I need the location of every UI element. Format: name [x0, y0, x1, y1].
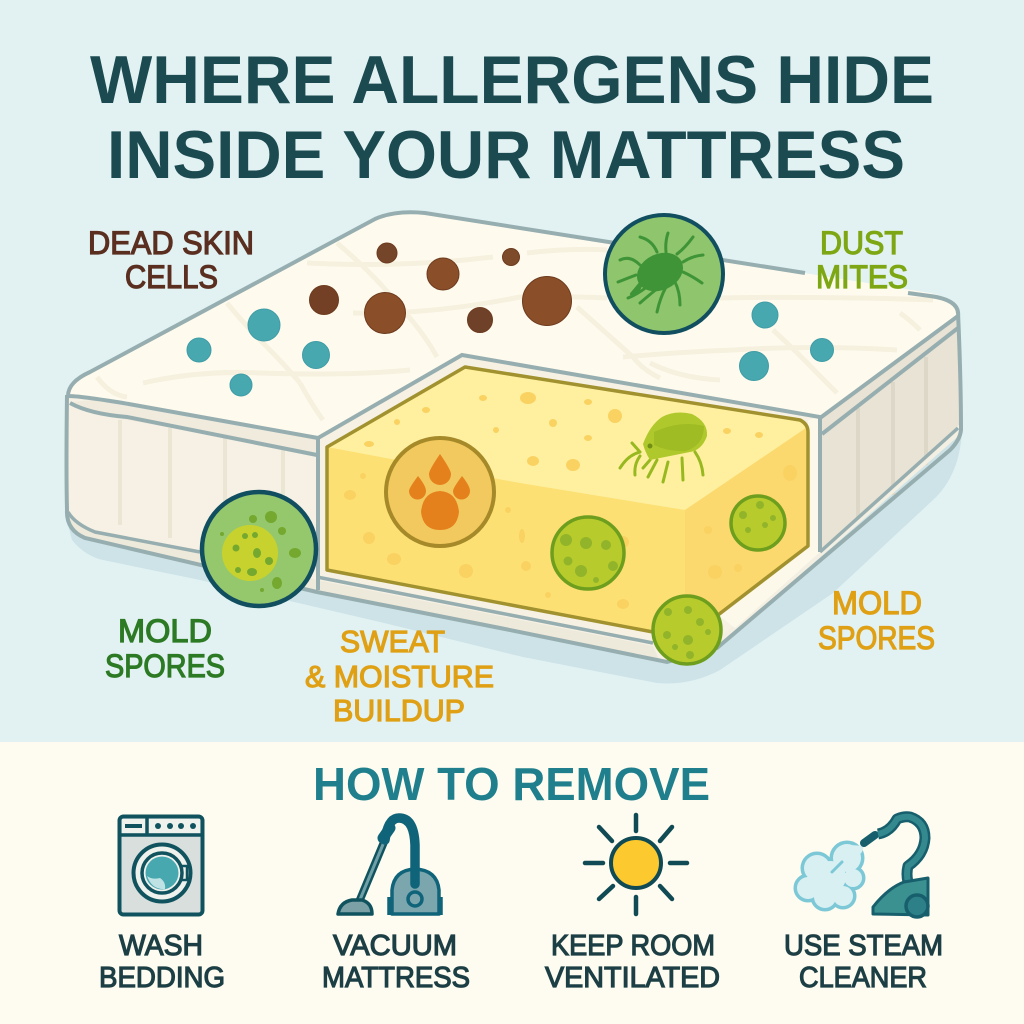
- mold spore circles: [552, 496, 785, 664]
- label: mold spores right: MOLD: [832, 585, 922, 621]
- label: mold spores left: SPORES: [105, 648, 225, 684]
- label: sweat and moisture buildup: & MOISTURE: [305, 659, 494, 694]
- callout: mold spores magnified: [202, 492, 316, 606]
- label: sweat and moisture buildup: BUILDUP: [333, 693, 465, 728]
- icon: vacuum cleaner: [338, 818, 441, 915]
- callout: sweat and moisture paw: [386, 438, 494, 546]
- label: wash bedding: WASH: [119, 930, 203, 962]
- mattress left side: [67, 395, 717, 662]
- label: dust mites: MITES: [816, 259, 908, 295]
- label: dead skin cells: CELLS: [125, 259, 218, 295]
- label: vacuum mattress: [322, 930, 470, 994]
- label: dead skin cells: DEAD SKIN: [88, 225, 254, 261]
- label: keep room ventilated: KEEP ROOM: [551, 930, 715, 962]
- label: dust mites: [816, 225, 908, 295]
- label: use steam cleaner: CLEANER: [799, 962, 927, 994]
- label: sweat and moisture buildup: SWEAT: [340, 624, 445, 659]
- label: mold spores right: [818, 585, 935, 656]
- title: WHERE ALLERGENS HIDE: [90, 42, 934, 118]
- icon: steam cleaner: [796, 817, 928, 917]
- label: mold spores right: SPORES: [818, 620, 935, 656]
- brown dead skin cell dots: [310, 243, 572, 334]
- mattress right side: [66, 312, 962, 662]
- label: use steam cleaner: [784, 930, 943, 994]
- title: INSIDE YOUR MATTRESS: [107, 117, 905, 193]
- label: wash bedding: BEDDING: [99, 962, 225, 994]
- label: dead skin cells: [88, 225, 254, 295]
- callout: dust mite magnified: [605, 215, 723, 333]
- heading: how to remove: HOW TO REMOVE: [313, 758, 710, 810]
- icon: sun: [585, 815, 687, 914]
- teal allergen dots: [187, 302, 834, 396]
- label: use steam cleaner: USE STEAM: [784, 930, 943, 962]
- icon: washing machine: [119, 816, 203, 914]
- mattress top surface: [68, 212, 958, 438]
- foam pores: [344, 392, 797, 609]
- label: wash bedding: [99, 930, 225, 994]
- label: vacuum mattress: MATTRESS: [322, 962, 470, 994]
- cut-away frame: [317, 355, 820, 644]
- mattress illustration: [66, 212, 962, 683]
- label: mold spores left: MOLD: [118, 613, 212, 649]
- label: sweat and moisture buildup: [305, 624, 494, 728]
- label: dust mites: DUST: [820, 225, 903, 261]
- title: [90, 42, 934, 193]
- label: vacuum mattress: VACUUM: [333, 930, 457, 962]
- label: keep room ventilated: VENTILATED: [545, 962, 720, 994]
- dust mite on foam: [620, 413, 707, 482]
- mattress shadow: [68, 430, 962, 683]
- foam core cross-section: [327, 367, 808, 632]
- label: keep room ventilated: [545, 930, 720, 994]
- label: mold spores left: [105, 613, 225, 684]
